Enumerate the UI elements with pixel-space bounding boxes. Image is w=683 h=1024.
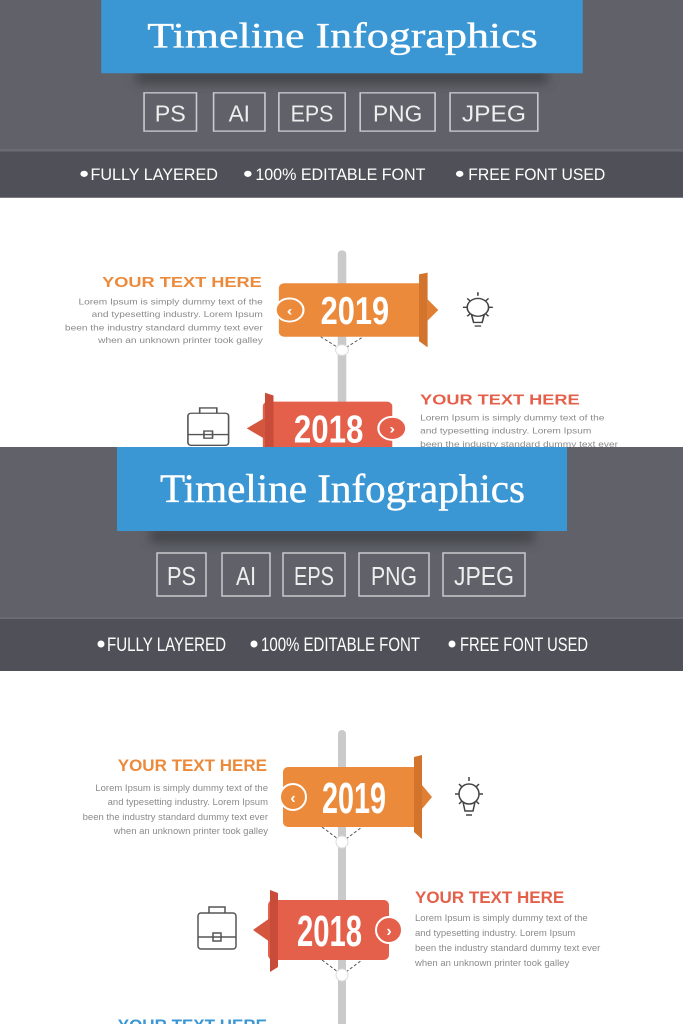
format badges: JPEG [462,101,526,127]
format badges: PNG [373,101,422,127]
text block: 2019: and typesetting industry. Lorem Ipsum [92,310,263,319]
feature band: 100% EDITABLE FONT [255,165,425,184]
title: Timeline Infographics [160,466,525,511]
format badges: EPS [291,101,333,127]
format badges: PNG [371,561,417,591]
icon: lightbulb [455,777,483,815]
text block: 2019: and typesetting industry. Lorem Ipsum [108,797,268,808]
title [117,447,567,531]
format badges: AI [229,101,250,127]
title [101,0,583,73]
text block: 2018: and typesetting industry. Lorem Ipsum [420,426,592,436]
text block: 2019: YOUR TEXT HERE [118,756,267,775]
text block: 2018: Lorem Ipsum is simply dummy text of the [415,913,588,924]
icon: briefcase [188,408,229,445]
timeline pole [338,250,346,517]
feature band: 100% EDITABLE FONT [261,635,420,656]
text block: 2018: and typesetting industry. Lorem Ipsum [415,928,575,939]
2019 item [276,273,438,355]
2018 item [247,393,406,474]
timeline pole [338,730,346,1024]
text block: 2019: been the industry standard dummy text ever [65,323,263,332]
text block: 2019: when an unknown printer took galley [113,826,268,837]
text block: 2018: Lorem Ipsum is simply dummy text of the [420,413,604,422]
text block: 2019 [65,273,263,345]
feature band: FULLY LAYERED [107,635,226,656]
feature band: FREE FONT USED [460,635,588,656]
text block: 2019: Lorem Ipsum is simply dummy text of the [79,297,263,306]
feature band: FULLY LAYERED [91,165,218,184]
text block: 2019: YOUR TEXT HERE [102,273,262,290]
format badges: PS [167,561,196,591]
format badges [144,93,538,131]
panel: bottom preview copy [0,447,683,1024]
text block: 2018: YOUR TEXT HERE [420,391,580,408]
text block: 2019: been the industry standard dummy text ever [83,812,268,823]
feature band [0,617,683,671]
text block: 2019: when an unknown printer took galley [97,336,263,345]
format badges: JPEG [454,561,514,591]
format badges [157,553,525,596]
text block: 2019: Lorem Ipsum is simply dummy text of the [95,783,268,794]
2018 item: › [386,923,392,940]
2018 item [253,890,402,981]
text block: 2018: YOUR TEXT HERE [415,888,564,907]
format badges: PS [155,101,186,127]
2019 item: 2019 [321,290,389,333]
format badges: AI [236,561,256,591]
text block: 2018: when an unknown printer took galley [414,958,569,969]
2019 item: ‹ [287,304,292,319]
feature band: FREE FONT USED [468,165,605,184]
text block: 2019 [83,756,268,837]
feature band [0,150,683,198]
2018 item: › [389,422,395,437]
title: Timeline Infographics [147,16,538,56]
text block: 2018 [419,391,618,462]
2019 item: ‹ [290,790,296,807]
panel: top preview copy [0,0,683,448]
icon: briefcase [198,907,236,949]
text block: 2018: been the industry standard dummy text ever [415,943,600,954]
format badges: EPS [294,561,334,591]
2019 item [280,755,432,848]
text block: 2018 [414,888,600,969]
2018 item: 2018 [297,907,362,956]
icon: lightbulb [463,292,493,326]
2019 item: 2019 [322,774,386,823]
